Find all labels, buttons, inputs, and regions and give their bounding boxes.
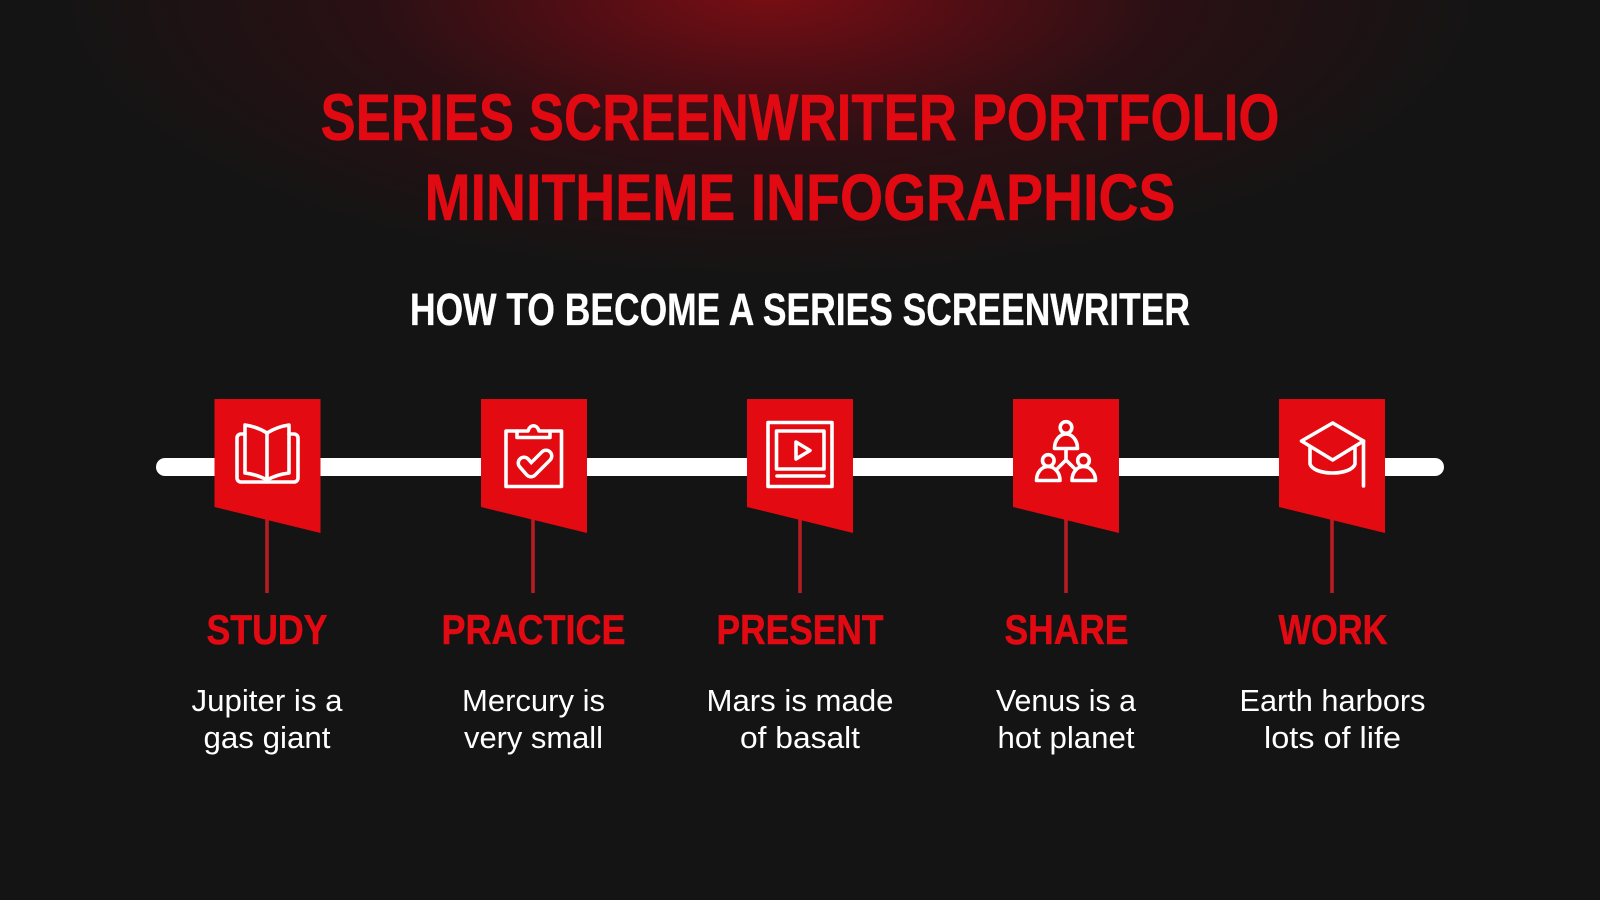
description: study: Jupiter is a	[192, 683, 343, 718]
step: present	[706, 399, 894, 755]
banner: work	[1279, 399, 1385, 533]
banner: present	[747, 399, 853, 533]
step: share	[996, 399, 1137, 755]
step: study	[192, 399, 343, 755]
step: work	[1240, 399, 1426, 755]
connector: study	[265, 500, 269, 593]
timeline bar	[156, 458, 1444, 476]
description: present: of basalt	[740, 720, 860, 755]
subtitle: HOW TO BECOME A SERIES SCREENWRITER	[410, 284, 1190, 335]
icon: video screen	[768, 422, 832, 486]
title	[320, 80, 1280, 234]
title: MINITHEME INFOGRAPHICS	[424, 160, 1176, 234]
label: present: PRESENT	[716, 606, 884, 653]
label: share: SHARE	[1004, 606, 1128, 653]
description: practice: Mercury is	[462, 683, 605, 718]
icon: people network	[1036, 422, 1096, 480]
banner: practice	[481, 399, 587, 533]
label: work: WORK	[1278, 606, 1388, 653]
banner: study	[214, 399, 320, 533]
step: practice	[442, 399, 626, 755]
description: practice	[462, 683, 605, 755]
description: practice: very small	[464, 720, 603, 755]
description: study	[192, 683, 343, 755]
description: share: hot planet	[998, 720, 1135, 755]
description: work	[1240, 683, 1426, 755]
connector: practice	[531, 500, 535, 593]
title: SERIES SCREENWRITER PORTFOLIO	[320, 80, 1280, 154]
description: work: lots of life	[1264, 720, 1401, 755]
connector: present	[798, 500, 802, 593]
connector: share	[1064, 500, 1068, 593]
description: share	[996, 683, 1137, 755]
icon: open book	[237, 425, 298, 482]
label: study: STUDY	[206, 606, 328, 653]
description: present	[706, 683, 894, 755]
icon: graduation cap	[1302, 423, 1364, 486]
banner: share	[1013, 399, 1119, 533]
icon: clipboard with check	[506, 426, 562, 486]
description: work: Earth harbors	[1240, 683, 1426, 718]
description: present: Mars is made	[706, 683, 894, 718]
label: practice: PRACTICE	[442, 606, 626, 653]
description: share: Venus is a	[996, 683, 1137, 718]
connector: work	[1330, 500, 1334, 593]
description: study: gas giant	[204, 720, 331, 755]
